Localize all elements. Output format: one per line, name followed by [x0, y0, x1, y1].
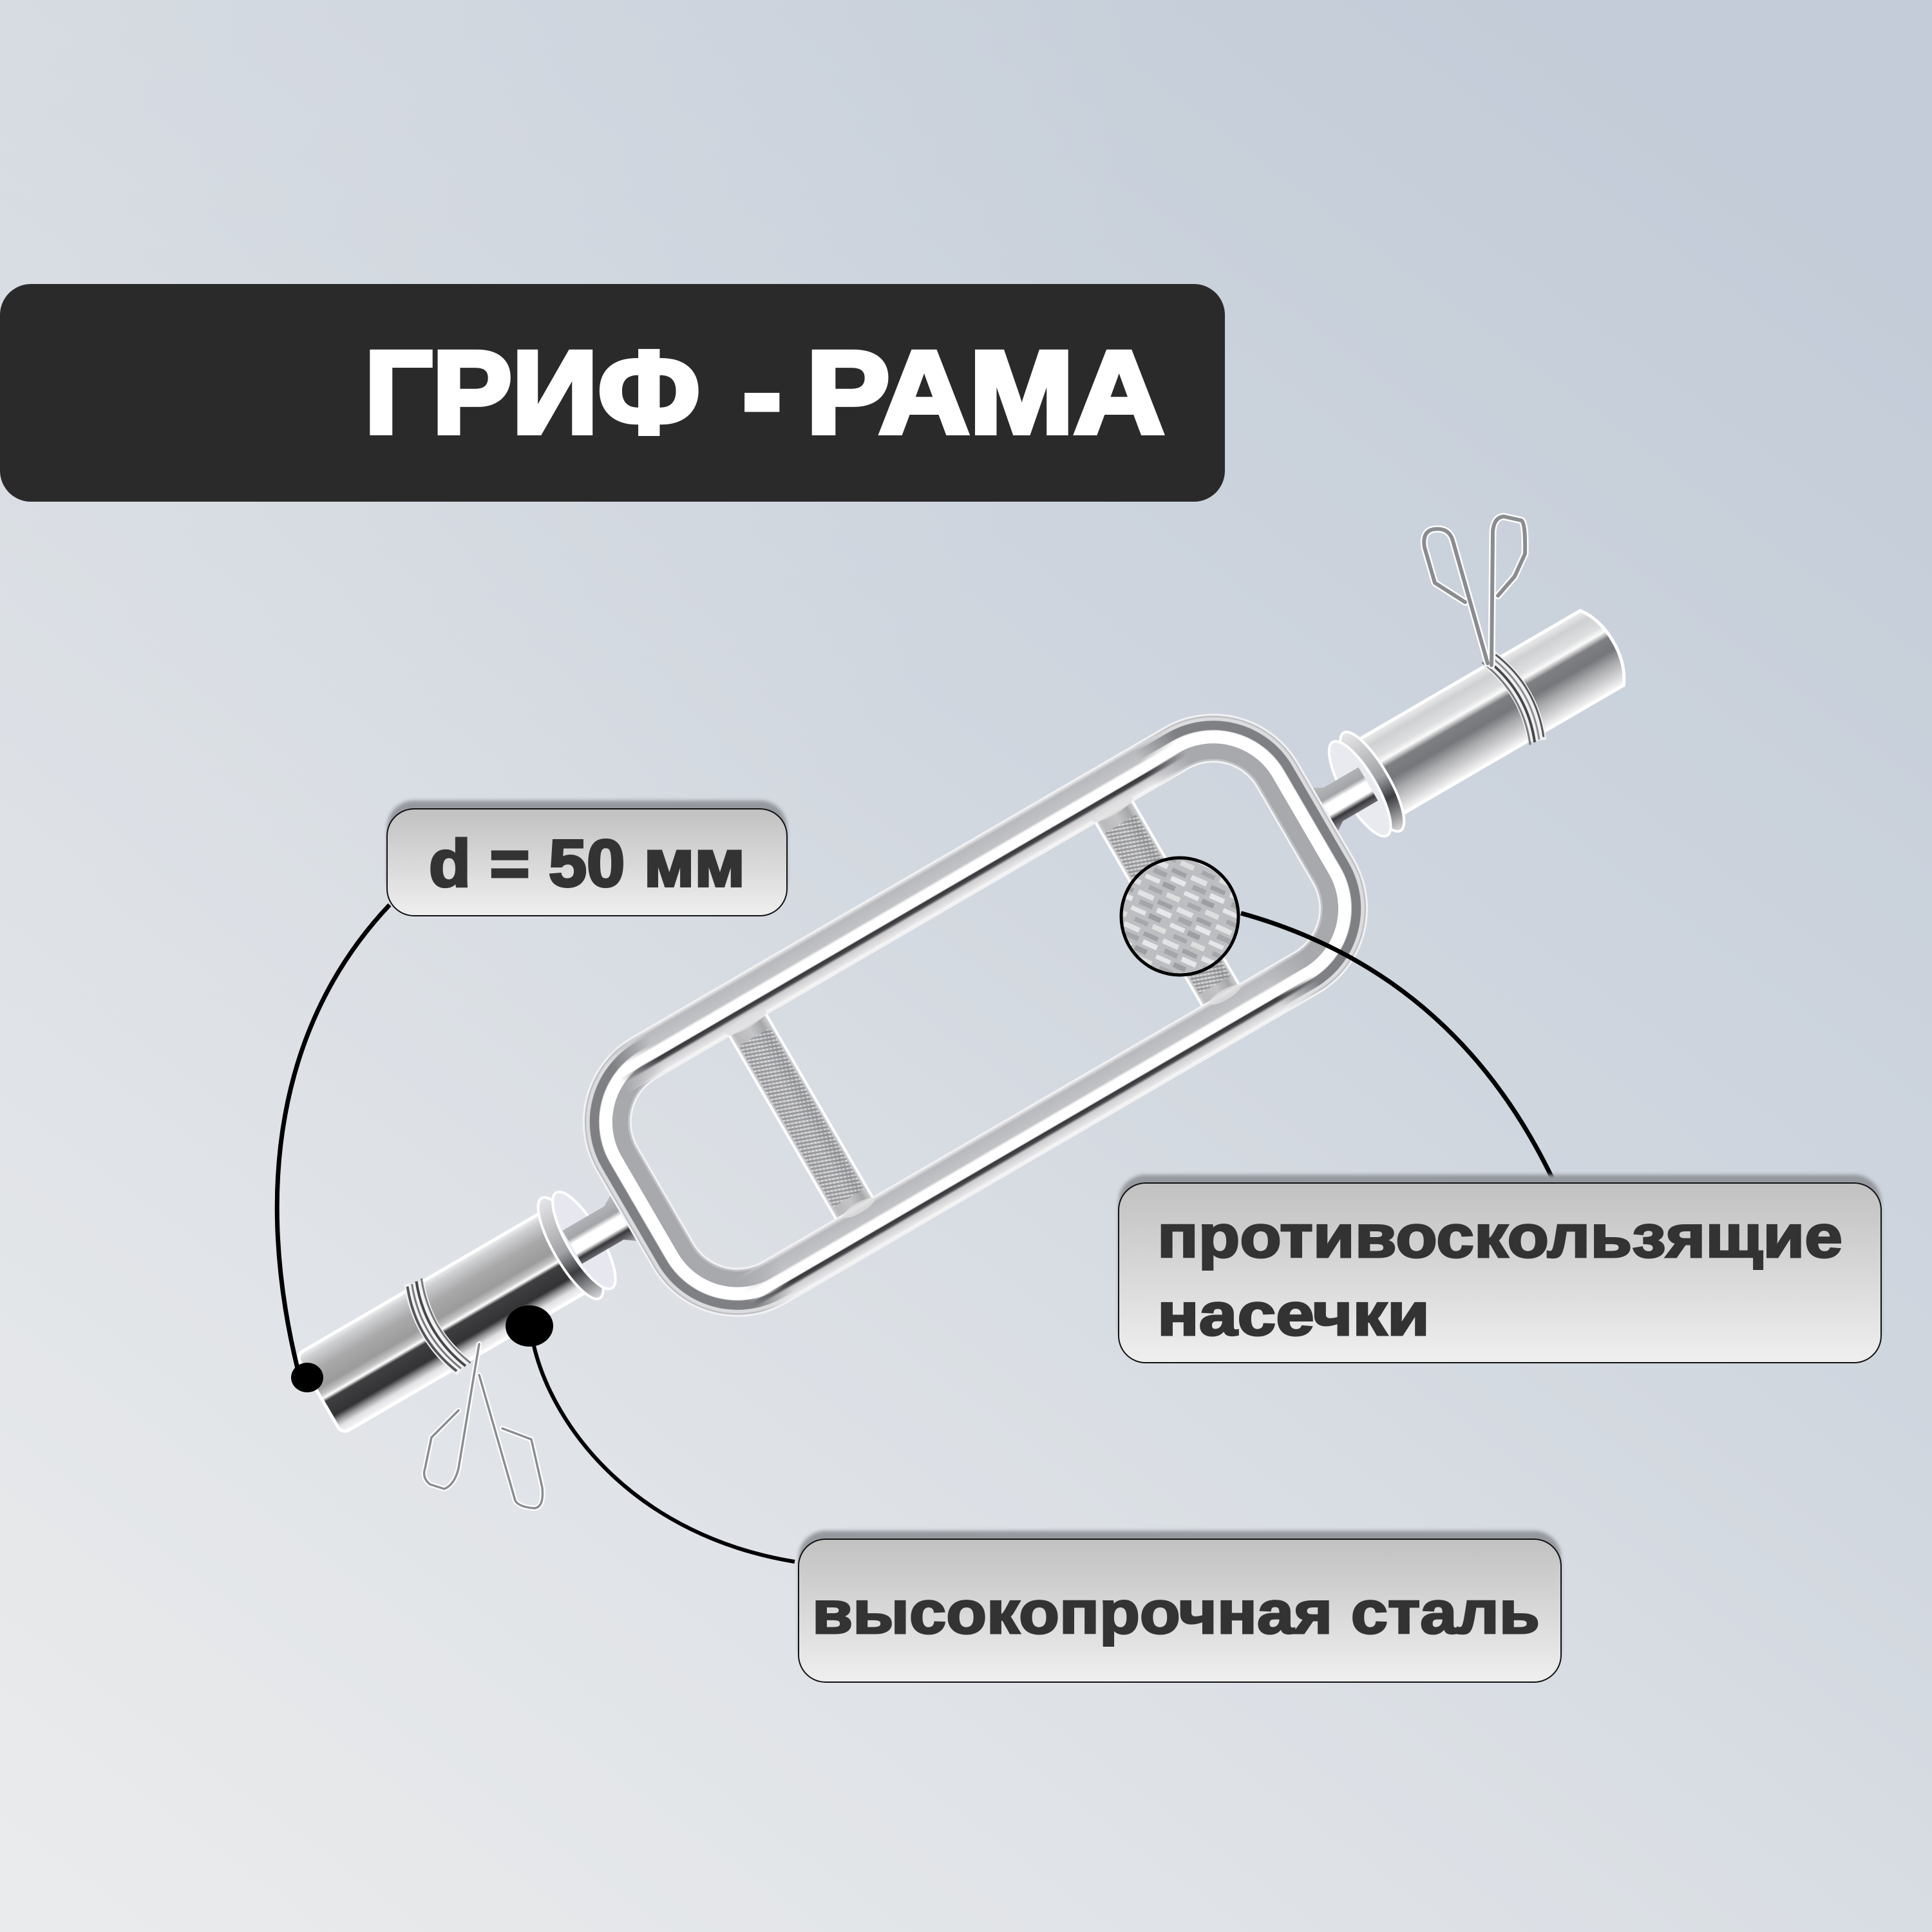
callout: anti-slip knurling [1119, 1175, 1881, 1363]
left sleeve coil [399, 1278, 471, 1376]
callout: anti-slip knurling: противоскользящие [1157, 1202, 1842, 1270]
frame tube [554, 685, 1397, 1346]
barbell: trap bar product [243, 512, 1691, 1528]
leader line: diameter [277, 905, 390, 1368]
callout: diameter [387, 800, 787, 916]
title text [365, 327, 1164, 458]
right flange [1317, 724, 1415, 846]
right knurled handle [1091, 793, 1244, 1015]
right sleeve [1347, 604, 1635, 821]
title text: - [743, 327, 782, 458]
right sleeve coil [1482, 650, 1552, 745]
leader line: steel [534, 1346, 795, 1562]
callout: anti-slip knurling: насечки [1157, 1280, 1430, 1348]
left knurled handle [725, 1007, 878, 1228]
callout: high-strength steel [799, 1531, 1561, 1682]
top rail [605, 726, 1193, 1094]
left wire clip [424, 1344, 542, 1508]
callout: diameter: d = 50 мм [429, 826, 745, 900]
title text: РАМА [806, 327, 1164, 458]
weld joints [723, 793, 1244, 1226]
right neck [1300, 757, 1385, 844]
right wire clip [1424, 516, 1525, 665]
callout: high-strength steel: высокопрочная сталь [812, 1578, 1540, 1646]
marker dot: steel [506, 1305, 553, 1347]
left flange [527, 1182, 628, 1307]
magnifier: knurling detail [1121, 858, 1238, 975]
leader line: knurling [1241, 913, 1553, 1179]
bottom rail [736, 950, 1323, 1318]
title text: ГРИФ [365, 327, 700, 458]
left neck [557, 1186, 648, 1276]
marker dot: diameter [291, 1363, 323, 1392]
title banner [0, 284, 1225, 502]
left sleeve [296, 1208, 595, 1434]
frame and sleeves [298, 609, 1625, 1433]
